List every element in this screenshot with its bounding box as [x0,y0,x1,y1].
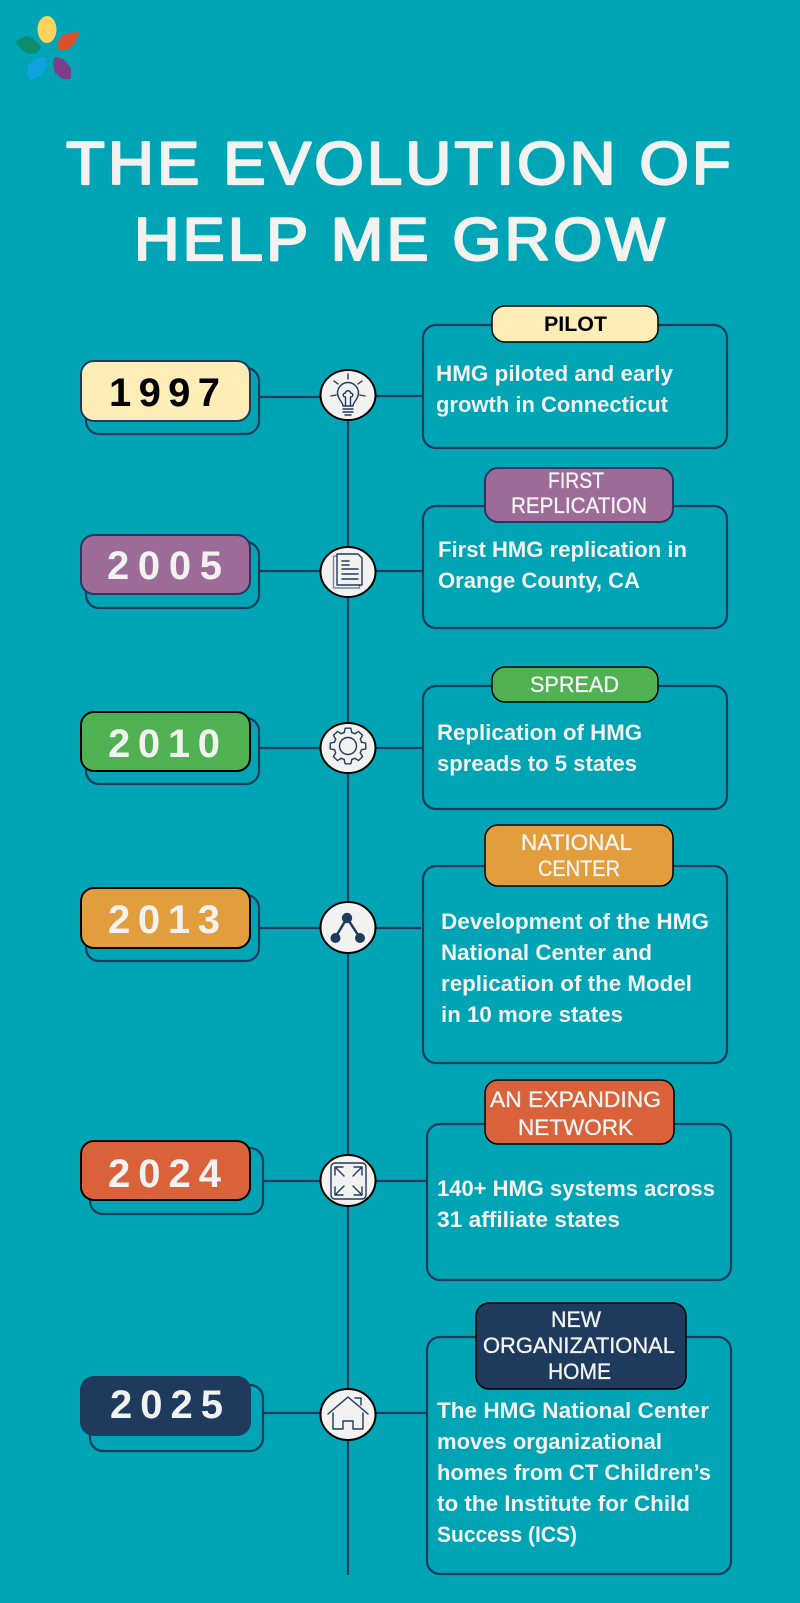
description: The HMG National Center [437,1398,709,1423]
description: HMG piloted and early [436,361,673,386]
year shadow outline [90,1148,263,1214]
label: an expanding network: NETWORK [518,1115,633,1140]
label: new organizational home: NEW [551,1307,601,1332]
label: national center: NATIONAL [521,830,632,855]
year badge 1997 [81,361,250,421]
label: first replication: FIRST [548,468,604,493]
title [66,130,734,273]
year shadow outline [86,542,259,608]
panel: first replication [423,468,727,628]
icon: documents [320,547,376,597]
year shadow outline [86,718,259,784]
description: First HMG replication in [438,537,687,562]
description: homes from CT Children’s [437,1460,711,1485]
label: new organizational home: ORGANIZATIONAL [483,1333,675,1358]
title: HELP ME GROW [134,206,668,273]
timeline spine [347,395,349,1575]
year badge 2005 [81,535,250,594]
milestone 2010 [81,712,376,784]
description: National Center and [441,940,652,965]
description [437,720,642,776]
year badge 1997: 1997 [109,371,220,415]
icon: light bulb [320,370,376,420]
year badge 2013: 2013 [108,898,220,942]
label: an expanding network: AN EXPANDING [490,1087,661,1112]
milestone 1997 [81,361,376,434]
milestone 2005 [81,535,376,608]
label: new organizational home [476,1303,686,1389]
description [437,1398,711,1547]
panel: new organizational home [427,1303,731,1574]
panel: spread [423,667,727,809]
label: pilot [492,306,658,342]
icon: network nodes [320,902,376,953]
description: Development of the HMG [441,909,709,934]
description: in 10 more states [441,1002,623,1027]
description: moves organizational [437,1429,662,1454]
year shadow outline [86,895,259,961]
year badge 2010: 2010 [108,722,220,766]
description: Orange County, CA [438,568,640,593]
year badge 2010 [81,712,250,771]
description: Replication of HMG [437,720,642,745]
milestone 2013 [81,888,376,961]
description: 31 affiliate states [437,1207,620,1232]
description [441,909,709,1027]
year badge 2005: 2005 [107,544,222,588]
description: 140+ HMG systems across [437,1176,715,1201]
label: first replication: REPLICATION [511,493,647,518]
description [436,361,673,417]
title: THE EVOLUTION OF [66,130,734,197]
description: growth in Connecticut [436,392,668,417]
year shadow outline [90,1385,263,1451]
logo: five petals [18,16,78,78]
icon: expand arrows [320,1155,376,1206]
description: spreads to 5 states [437,751,637,776]
connector lines [260,396,427,1413]
label: an expanding network [485,1080,674,1144]
year shadow outline [86,368,259,434]
label: spread [492,667,658,702]
label: first replication [485,468,673,522]
icon: house [320,1389,376,1440]
year badge 2024 [81,1141,250,1200]
year badge 2024: 2024 [108,1152,222,1196]
milestone 2025 [80,1376,376,1451]
icon: gear [320,723,376,773]
label: spread: SPREAD [530,672,619,697]
panel: an expanding network [427,1080,731,1280]
label: new organizational home: HOME [548,1359,611,1384]
description: to the Institute for Child [437,1491,690,1516]
description: replication of the Model [441,971,692,996]
description [438,537,687,593]
year badge 2013 [81,888,250,948]
year badge 2025: 2025 [110,1383,223,1427]
description: Success (ICS) [437,1522,577,1547]
milestone 2024 [81,1141,376,1214]
label: pilot: PILOT [544,313,607,336]
label: national center [485,825,673,886]
panel: national center [423,825,727,1063]
label: national center: CENTER [538,856,620,881]
panel: pilot [423,306,727,448]
description [437,1176,715,1232]
year badge 2025 [80,1376,251,1436]
